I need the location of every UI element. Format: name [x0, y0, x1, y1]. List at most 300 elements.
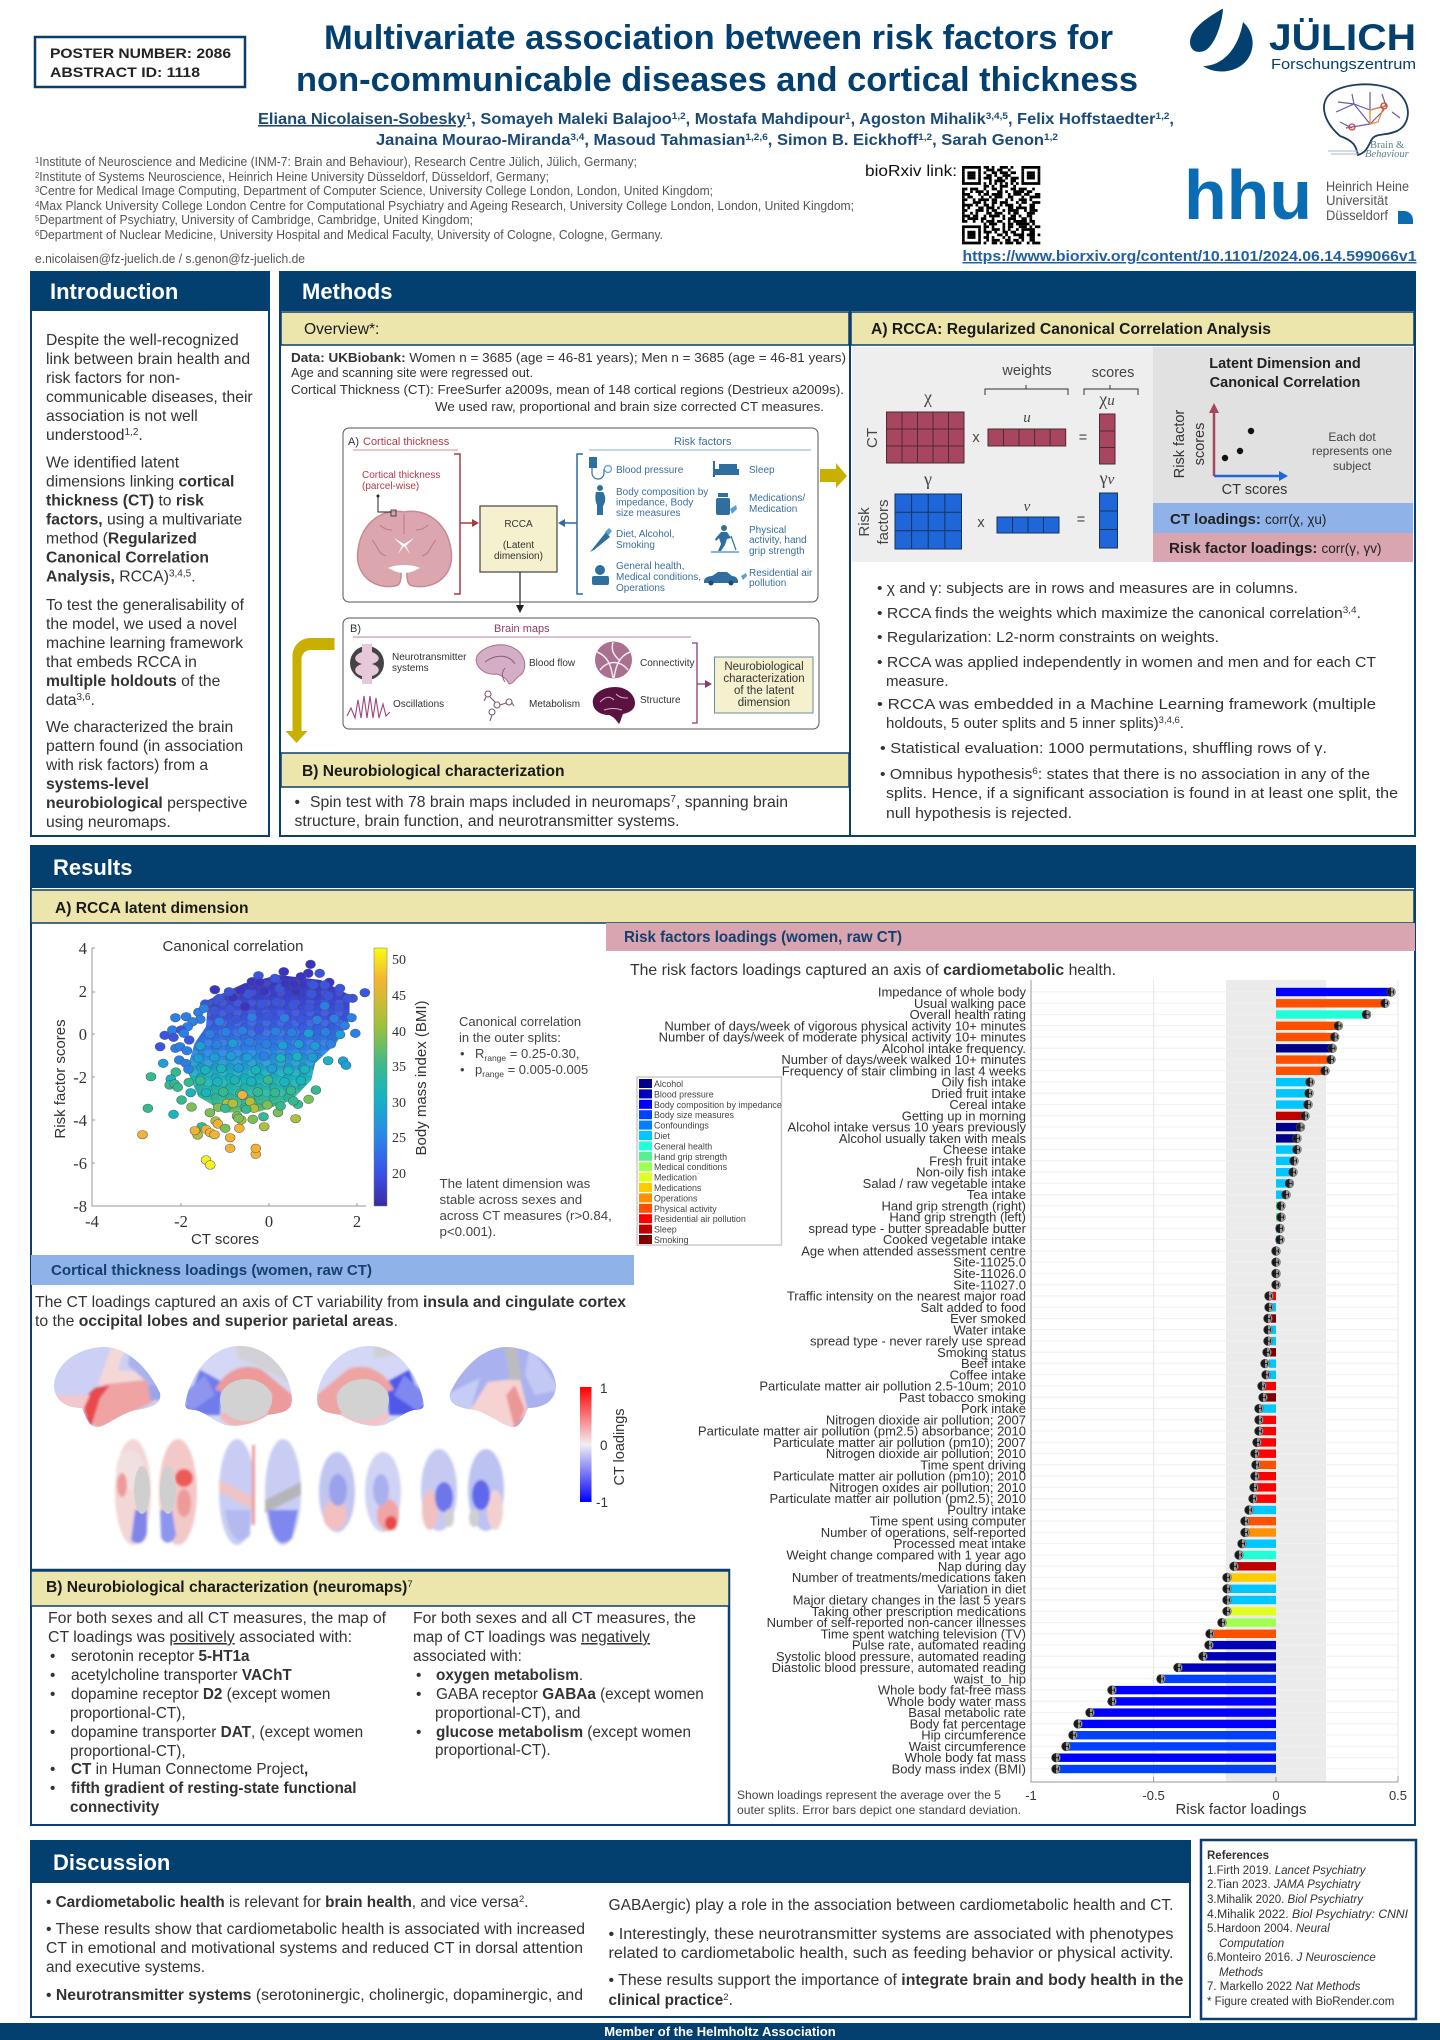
text: RCCA bullet points: • RCCA was applied independently in women and men and for each CT [877, 654, 1376, 671]
title [296, 19, 1138, 99]
chart: risk factor loadings bars: Alcohol intake frequency. [882, 1041, 1026, 1056]
chart: risk factor loadings bars: Smoking status [937, 1345, 1026, 1360]
panel: introduction: link between brain health and [46, 351, 250, 368]
text: RCCA bullet points: measure. [886, 673, 949, 690]
affiliations: 2 [35, 171, 40, 180]
diagram: RCCA matrices: weights [1001, 363, 1052, 379]
chart: risk factor loadings bars: Pork intake [961, 1401, 1026, 1416]
authors: , Sarah Genon [932, 132, 1044, 149]
chart: risk factor loadings bars: Number of self-reported non-cancer illnesses [767, 1615, 1026, 1630]
text: RCCA bullet points [877, 580, 1398, 822]
text: negatively associated: For both sexes and all CT measures, the [413, 1610, 696, 1627]
panel: references: References [1207, 1850, 1269, 1862]
chart: risk factor loadings bars: Whole body water mass [887, 1694, 1026, 1709]
diagram: latent dimension and canonical correlation: Risk factor [1172, 410, 1188, 478]
text: risk factor categories: impedance, Body [616, 498, 693, 508]
authors: , Mostafa Mahdipour [686, 111, 845, 128]
affiliations: Institute of Neuroscience and Medicine (INM-7: Brain and Behaviour), Research Centre Jülich, Jülich, Germany; [39, 155, 637, 169]
text: overview data description: Age and scanning site were regressed out. [291, 365, 533, 380]
scatter points [138, 960, 370, 1169]
text: discussion right column: related to cardiometabolic health, such as feeding behavior or physical activity. [608, 1945, 1174, 1962]
legend: risk factor categories: Body size measures [654, 1110, 734, 1120]
chart: risk factor loadings bars: Frequency of stair climbing in last 4 weeks [782, 1063, 1026, 1078]
panel: introduction: . [138, 427, 143, 444]
text: risk factor categories: Diet, Alcohol, [616, 529, 674, 540]
brain surfaces: dorsal and ventral views [115, 1439, 504, 1545]
authors: 1,2 [1156, 111, 1169, 122]
authors [258, 111, 1174, 149]
colorbar: CT loadings: CT loadings [612, 1408, 628, 1486]
chart: risk factor loadings bars: spread type - butter spreadable butter [808, 1221, 1027, 1236]
affiliations: Centre for Medical Image Computing, Department of Computer Science, University College London, London, United Kingdom; [39, 184, 713, 198]
text: risk factor categories: pollution [749, 578, 786, 589]
text: risk factor categories: activity, hand [749, 535, 807, 546]
chart: canonical correlation scatter: 0 [79, 1025, 87, 1044]
diagram: study design A: A) [348, 436, 359, 448]
text: positively associated: serotonin receptor 5-HT1a [71, 1648, 250, 1665]
panel: introduction: association is not well [46, 408, 198, 425]
box: neurobiological characterization: Neurobiological [724, 661, 804, 673]
panel: introduction: method (Regularized [46, 530, 197, 548]
diagram: latent dimension and canonical correlation: represents one [1312, 444, 1392, 458]
title: Multivariate association between risk factors for [324, 19, 1113, 57]
text: chart caption: Shown loadings represent the average over the 5 [737, 1788, 1001, 1802]
text: risk factor categories: size measures [616, 508, 680, 519]
diagram: study design B: Brain maps [494, 623, 550, 635]
heading: RCCA [851, 312, 1414, 345]
text: discussion right column: GABAergic) play a role in the association between cardiometabolic health and CT. [608, 1897, 1174, 1914]
diagram: study design B: Metabolism [529, 699, 580, 710]
text: positively associated: • [50, 1724, 55, 1741]
panel: introduction [30, 271, 270, 836]
text: canonical correlation in outer splits: Canonical correlation [459, 1014, 581, 1029]
diagram: RCCA matrices: γv [1099, 468, 1115, 488]
panel: references: * Figure created with BioRender.com [1207, 1996, 1394, 2008]
text: discussion left column [46, 1894, 585, 2004]
affiliations: 6 [35, 229, 40, 238]
affiliations: e.nicolaisen@fz-juelich.de / s.genon@fz-juelich.de [35, 252, 305, 266]
text: discussion left column: • Neurotransmitter systems (serotoninergic, cholinergic, dopaminergic, and [46, 1987, 583, 2004]
icon: connectivity [595, 642, 632, 678]
diagram: study design B: systems [392, 663, 429, 674]
icon: oscillations [347, 696, 390, 718]
chart: risk factor loadings bars: Waist circumference [909, 1739, 1026, 1754]
panel: introduction: . [90, 692, 95, 709]
bioRxiv URL: https://www.biorxiv.org/content/10.1101/2024.06.14.599066v1 [962, 248, 1416, 265]
chart: canonical correlation scatter: 0 [265, 1212, 273, 1231]
chart: risk factor loadings bars: Hand grip strength (right) [881, 1198, 1026, 1213]
text: RCCA bullet points: • Regularization: L2-norm constraints on weights. [877, 629, 1219, 646]
text: risk factor categories: Medications/ [749, 493, 805, 504]
diagram: study design A [343, 428, 818, 602]
diagram: latent dimension and canonical correlation: Each dot [1328, 430, 1376, 444]
panel: introduction: the model, we used a novel [46, 616, 237, 633]
panel: introduction: systems-level [46, 776, 149, 793]
affiliations [35, 155, 854, 266]
affiliations: Max Planck University College London Centre for Computational Psychiatry and Ageing Research, University College London, London, United Kingdom; [39, 199, 854, 213]
panel: B neurobiological characterization (results): B) Neurobiological characterization (neuromaps) [46, 1579, 407, 1596]
chart: risk factor loadings bars: Non-oily fish intake [916, 1165, 1026, 1180]
diagram: RCCA matrices [852, 347, 1153, 562]
authors: , [1169, 111, 1174, 128]
text: risk factor categories: Blood pressure [616, 465, 684, 476]
poster number box: POSTER NUMBER: 2086 [50, 45, 231, 61]
chart: risk factor loadings bars: Body fat percentage [910, 1716, 1026, 1731]
logo: Brain and Behaviour: Behaviour [1365, 149, 1410, 160]
chart: risk factor loadings bars: 0 [1272, 1788, 1280, 1803]
text: negatively associated: GABA receptor GABAa (except women [436, 1686, 704, 1703]
chart: risk factor loadings bars: Nitrogen dioxide air pollution; 2010 [826, 1446, 1026, 1461]
panel: introduction: with risk factors) from a [45, 757, 208, 774]
text: risk factor categories: Operations [616, 583, 665, 594]
panel: references [1201, 1840, 1416, 2019]
chart: risk factor loadings bars: Particulate matter air pollution 2.5-10um; 2010 [759, 1379, 1026, 1394]
chart: risk factor loadings bars: Basal metabolic rate [908, 1705, 1026, 1720]
panel: introduction: We identified latent [46, 454, 180, 472]
text: RCCA bullet points: . [1357, 605, 1361, 622]
chart: risk factor loadings bars [659, 980, 1407, 1818]
text: RCCA bullet points: : states that there is no association in any of the [1038, 766, 1370, 783]
chart: risk factor loadings bars: Nap during day [938, 1559, 1026, 1574]
legend: risk factor categories: Residential air pollution [654, 1214, 746, 1224]
text: latent dimension stability [440, 1176, 612, 1239]
logo: hhu: hhu [1184, 156, 1312, 234]
diagram: RCCA matrices: γ [923, 469, 932, 489]
diagram: RCCA matrices: Risk [856, 507, 873, 537]
arrow: yellow bent down [286, 638, 334, 743]
box: neurobiological characterization: dimension [738, 697, 790, 709]
chart: risk factor loadings bars: Oily fish intake [941, 1075, 1026, 1090]
chart: risk factor loadings bars: Impedance of whole body [878, 984, 1026, 1000]
chart: risk factor loadings bars: Number of days/week of moderate physical activity 10+ minutes [659, 1030, 1026, 1044]
text: canonical correlation in outer splits: • [460, 1046, 465, 1061]
text: spin test [294, 794, 788, 830]
panel: introduction: dimensions linking cortical [46, 474, 234, 490]
authors: 1,2 [918, 132, 932, 143]
authors: 1 [845, 111, 851, 122]
panel: references: Methods [1219, 1967, 1263, 1979]
text: positively associated: acetylcholine transporter VAChT [71, 1667, 292, 1684]
legend: risk factor categories: Sleep [654, 1225, 677, 1235]
text: discussion left column: • These results show that cardiometabolic health is associated with increased [46, 1921, 585, 1938]
legend: risk factor categories: General health [654, 1141, 712, 1151]
chart: canonical correlation scatter: Risk factor scores [52, 1019, 69, 1139]
logo: Brain and Behaviour: Brain & [1370, 140, 1404, 151]
chart: risk factor loadings bars: Overall health rating [910, 1007, 1026, 1022]
text: positively associated: fifth gradient of resting-state functional [71, 1780, 357, 1797]
text: RCCA bullet points: 3,4 [1343, 605, 1357, 616]
text: discussion left column: CT in emotional and motivational systems and reduced CT in dorsal attention [46, 1940, 583, 1957]
box: neurobiological characterization [714, 657, 813, 713]
panel: introduction: that embeds RCCA in [46, 654, 197, 671]
colorbar: BMI: 30 [392, 1096, 406, 1111]
text: discussion right column: . [729, 1992, 733, 2009]
RCCA box: (Latent [503, 540, 534, 551]
diagram: study design B: Structure [640, 695, 681, 706]
diagram: latent dimension and canonical correlation: CT scores [1222, 482, 1287, 498]
diagram: RCCA matrices: u [1023, 410, 1031, 426]
panel: introduction: We characterized the brain [46, 719, 233, 736]
authors: , Simon B. Eickhoff [768, 132, 919, 149]
diagram: RCCA matrices: = [1077, 512, 1085, 528]
chart: risk factor loadings bars: Weight change compared with 1 year ago [786, 1548, 1026, 1562]
text: overview data description: Data: UKBiobank: Women n = 3685 (age = 46-81 years); Men n = 3685 (age = 46-81 years) [291, 350, 846, 365]
text: positively associated: CT loadings was positively associated with: [48, 1629, 352, 1646]
text: positively associated: proportional-CT), [70, 1743, 186, 1760]
heading: overview [281, 312, 849, 345]
authors: , Agoston Mihalik [851, 111, 986, 128]
text: risk factor categories: Physical [749, 525, 786, 536]
panel: methods: Methods [302, 279, 392, 304]
chart: risk factor loadings bars: Fresh fruit intake [929, 1153, 1026, 1168]
panel: introduction: understood [46, 427, 124, 444]
text: spin test: Spin test with 78 brain maps included in neuromaps [310, 794, 669, 811]
RCCA box: RCCA [504, 519, 533, 530]
text: negatively associated: associated with: [413, 1648, 522, 1665]
diagram: study design B: Blood flow [529, 658, 576, 669]
chart: risk factor loadings bars: Alcohol usually taken with meals [839, 1131, 1026, 1146]
arrow: yellow right [820, 463, 847, 488]
chart: risk factor loadings bars: Site-11025.0 [953, 1255, 1026, 1270]
callout: risk factor loadings [1153, 533, 1413, 562]
diagram: RCCA matrices: χu [1098, 389, 1115, 409]
text: latent dimension stability: p<0.001). [440, 1224, 496, 1239]
chart: risk factor loadings bars: Poultry intake [947, 1502, 1026, 1518]
poster number box: ABSTRACT ID: 1118 [50, 64, 200, 80]
colorbar: CT loadings: -1 [596, 1495, 608, 1510]
matrix: Xu [1100, 414, 1115, 464]
diagram: RCCA matrices: χ [923, 387, 932, 407]
chart: canonical correlation scatter: -4 [73, 1111, 87, 1130]
chart: risk factor loadings bars: Whole body fat mass [905, 1750, 1026, 1765]
panel: introduction: risk factors for non- [46, 370, 180, 387]
text: canonical correlation in outer splits: range [482, 1069, 504, 1079]
diagram: RCCA matrices: factors [875, 499, 892, 545]
text: positively associated: • [50, 1761, 55, 1778]
colorbar: BMI: 20 [392, 1167, 406, 1182]
text: latent dimension stability: The latent dimension was [440, 1176, 591, 1191]
colorbar: BMI: 50 [392, 953, 406, 968]
brain surfaces: lateral and medial views [50, 1345, 560, 1430]
colorbar: BMI: 25 [392, 1131, 406, 1146]
chart: risk factor loadings bars: Usual walking pace [914, 996, 1026, 1011]
heading: A RCCA latent dimension: A) RCCA latent dimension [55, 900, 248, 917]
text: risk factor categories: General health, [616, 561, 684, 572]
text: positively associated: CT in Human Connectome Project, [71, 1761, 308, 1778]
heading: cortical thickness loadings: Cortical thickness loadings (women, raw CT) [51, 1263, 372, 1279]
legend: risk factor categories: Medications [654, 1183, 702, 1193]
text: negatively associated: glucose metabolism (except women [436, 1724, 691, 1741]
footer [0, 2023, 1440, 2040]
diagram: study design B: Connectivity [640, 658, 694, 669]
text: risk factor categories [616, 465, 813, 594]
diagram: study design B: Neurotransmitter [392, 652, 467, 663]
text: spin test: , spanning brain [676, 794, 788, 811]
diagram: latent dimension and canonical correlation: subject [1333, 459, 1372, 473]
diagram: latent dimension and canonical correlation: scores [1192, 423, 1208, 465]
chart: risk factor loadings bars: Cheese intake [943, 1142, 1026, 1157]
text: spin test: structure, brain function, and neurotransmitter systems. [294, 813, 680, 830]
authors: , Felix Hoffstaedter [1008, 111, 1156, 128]
chart: risk factor loadings bars: Salt added to food [920, 1300, 1026, 1315]
chart: risk factor loadings bars: Age when attended assessment centre [801, 1244, 1026, 1258]
text: positively associated: • [50, 1648, 55, 1665]
text: canonical correlation in outer splits: p [475, 1062, 482, 1077]
panel: results [30, 845, 1416, 1825]
icon: structure brain [593, 687, 635, 724]
text: discussion left column: . [524, 1894, 528, 1911]
text: negatively associated: oxygen metabolism. [436, 1667, 583, 1684]
colorbar: CT loadings: 0 [600, 1438, 608, 1453]
text: RCCA bullet points: 6 [1032, 766, 1038, 777]
authors: Janaina Mourao-Miranda [376, 132, 560, 149]
text: discussion right column: 2 [723, 1992, 729, 2003]
box: neurobiological characterization: of the latent [734, 685, 795, 697]
text: spin test: • [294, 794, 300, 811]
panel: introduction: Analysis, RCCA) [46, 568, 169, 586]
chart: risk factor loadings bars: 0.5 [1389, 1788, 1407, 1803]
chart: risk factor loadings bars: Whole body fat-free mass [878, 1683, 1026, 1698]
chart: risk factor loadings bars: Time spent using computer [870, 1514, 1027, 1529]
affiliations: 4 [35, 200, 40, 209]
legend: risk factor categories: Blood pressure [654, 1089, 714, 1099]
diagram: study design B: Oscillations [393, 699, 444, 710]
chart: risk factor loadings bars: Cooked vegetable intake [883, 1232, 1026, 1247]
text: risk factor categories: Medication [749, 504, 797, 515]
chart: risk factor loadings bars: Processed meat intake [894, 1536, 1026, 1551]
chart: risk factor loadings bars: Nitrogen oxides air pollution; 2010 [829, 1480, 1026, 1495]
logo: Brain and Behaviour [1324, 84, 1410, 160]
chart: risk factor loadings bars: Beef intake [961, 1356, 1026, 1371]
legend: risk factor categories: Body composition by impedance [654, 1100, 782, 1110]
text: risk factor categories: Body composition by [616, 487, 708, 498]
legend: risk factor categories: Confoundings [654, 1121, 709, 1131]
panel: discussion [30, 1840, 1191, 2017]
text: discussion right column: • Interestingly, these neurotransmitter systems are associated with phenotypes [608, 1926, 1174, 1943]
diagram: RCCA matrices: x [972, 430, 980, 446]
authors: 3,4 [570, 132, 585, 143]
text: risk factor categories: Medical conditions, [616, 572, 701, 583]
matrix: u [988, 429, 1066, 446]
authors: 1,2 [1044, 132, 1058, 143]
text: overview data description: Cortical Thickness (CT): FreeSurfer a2009s, mean of 148 cortical regions (Destrieux a2009s). [291, 382, 844, 397]
colorbar: CT loadings [580, 1381, 628, 1510]
colorbar: BMI: 35 [392, 1060, 406, 1075]
chart: risk factor loadings bars: Number of days/week walked 10+ minutes [781, 1052, 1026, 1067]
chart: risk factor loadings bars: spread type - never rarely use spread [810, 1334, 1026, 1349]
heading: B neurobiological characterization (methods): B) Neurobiological characterization [302, 763, 565, 780]
icon: blood flow brain [476, 645, 525, 684]
text: negatively associated: proportional-CT). [435, 1742, 551, 1759]
panel: references: 4.Mihalik 2022. Biol Psychiatry: CNNI [1207, 1909, 1409, 1921]
authors: 1 [466, 111, 472, 122]
panel: B neurobiological characterization (results): 7 [407, 1579, 413, 1590]
chart: canonical correlation scatter: -2 [174, 1212, 188, 1231]
text: CT axis: to the occipital lobes and superior parietal areas. [35, 1313, 398, 1330]
text: discussion right column [608, 1897, 1184, 2009]
chart: canonical correlation scatter: CT scores [191, 1231, 259, 1248]
icons: risk factors [589, 457, 747, 586]
text: CT axis: The CT loadings captured an axis of CT variability from insula and cingulate cortex [35, 1294, 626, 1311]
diagram: study design A: (parcel-wise) [362, 481, 419, 492]
text: canonical correlation in outer splits [459, 1014, 588, 1079]
text: canonical correlation in outer splits: range [484, 1053, 506, 1063]
diagram: RCCA matrices: scores [1092, 365, 1134, 381]
text: latent dimension stability: across CT measures (r>0.84, [440, 1208, 612, 1223]
chart: risk factor loadings bars: -1 [1025, 1788, 1037, 1803]
authors: 1,2 [672, 111, 686, 122]
text: discussion right column: clinical practice [608, 1992, 723, 2009]
chart: canonical correlation scatter: -2 [73, 1068, 87, 1087]
chart: canonical correlation scatter: -6 [73, 1154, 87, 1173]
heading: risk factors loadings: Risk factors loadings (women, raw CT) [624, 929, 902, 946]
text: risk factor categories: Sleep [749, 465, 775, 476]
bioRxiv label: bioRxiv link: [865, 163, 957, 180]
text: latent dimension stability: stable across sexes and [440, 1192, 582, 1207]
chart: risk factor loadings bars: Particulate matter air pollution (pm10); 2010 [773, 1469, 1026, 1484]
logo: Jülich [1190, 9, 1416, 73]
affiliations: Institute of Systems Neuroscience, Heinrich Heine University Düsseldorf, Düsseldorf, Germany; [39, 170, 549, 184]
chart: risk factor loadings bars: Number of operations, self-reported [821, 1525, 1026, 1540]
authors: 3,4,5 [986, 111, 1009, 122]
panel: introduction: To test the generalisability of [46, 597, 245, 614]
affiliations: 5 [35, 214, 40, 223]
text: positively associated [48, 1610, 387, 1816]
chart: risk factor loadings bars: Cereal intake [949, 1097, 1026, 1112]
chart: risk factor loadings bars: Dried fruit intake [931, 1086, 1026, 1101]
chart: risk factor loadings bars: Time spent driving [920, 1457, 1026, 1472]
panel: introduction: Despite the well-recognized [46, 332, 239, 349]
legend: risk factor categories: Diet [654, 1131, 670, 1141]
panel: introduction: communicable diseases, their [46, 389, 253, 406]
panel: introduction: 3,6 [77, 692, 91, 703]
text: risk factor categories: grip strength [749, 546, 805, 557]
chart: canonical correlation scatter: -8 [73, 1197, 87, 1216]
panel: references: 7. Markello 2022 Nat Methods [1207, 1981, 1361, 1993]
chart: canonical correlation scatter: Canonical correlation [163, 938, 303, 955]
heading: A RCCA latent dimension [31, 890, 1414, 923]
legend: risk factor categories: Operations [654, 1193, 698, 1203]
text: CT axis [35, 1294, 626, 1330]
chart: risk factor loadings bars: waist_to_hip [953, 1671, 1026, 1686]
panel: introduction: neurobiological perspective [46, 795, 248, 812]
text: chart caption [737, 1788, 1021, 1817]
panel: B neurobiological characterization (results) [31, 1570, 729, 1825]
chart: risk factor loadings bars: Risk factor loadings [1176, 1801, 1306, 1818]
text: RCCA bullet points: • RCCA finds the weights which maximize the canonical correlation [877, 605, 1321, 622]
text: RCCA bullet points: . [1180, 715, 1184, 732]
icon: metabolism molecules [484, 691, 514, 721]
text: RCCA bullet points: • χ and γ: subjects are in rows and measures are in columns. [877, 580, 1298, 597]
chart: canonical correlation scatter [52, 938, 430, 1248]
title: non-communicable diseases and cortical thickness [296, 61, 1138, 99]
chart: risk factor loadings bars: Site-11026.0 [953, 1266, 1026, 1281]
logo: Jülich: JÜLICH [1269, 17, 1416, 58]
text: canonical correlation in outer splits: = 0.25-0.30, [506, 1046, 580, 1061]
text: risk factor categories: Smoking [616, 540, 655, 551]
panel: introduction: data [46, 692, 77, 709]
chart: canonical correlation scatter: 4 [79, 939, 87, 958]
chart: risk factor loadings bars: Body mass index (BMI) [892, 1762, 1026, 1776]
logo: hhu: Universität [1326, 193, 1388, 208]
text: discussion left column: and executive systems. [46, 1959, 205, 1976]
panel: references: 1.Firth 2019. Lancet Psychiatry [1207, 1865, 1367, 1877]
RCCA box: dimension) [494, 551, 543, 562]
diagram: study design A: Cortical thickness [362, 470, 440, 481]
chart: risk factor loadings bars: Coffee intake [950, 1367, 1026, 1382]
panel: introduction: using neuromaps. [46, 814, 171, 831]
text: positively associated: proportional-CT), [70, 1705, 186, 1722]
